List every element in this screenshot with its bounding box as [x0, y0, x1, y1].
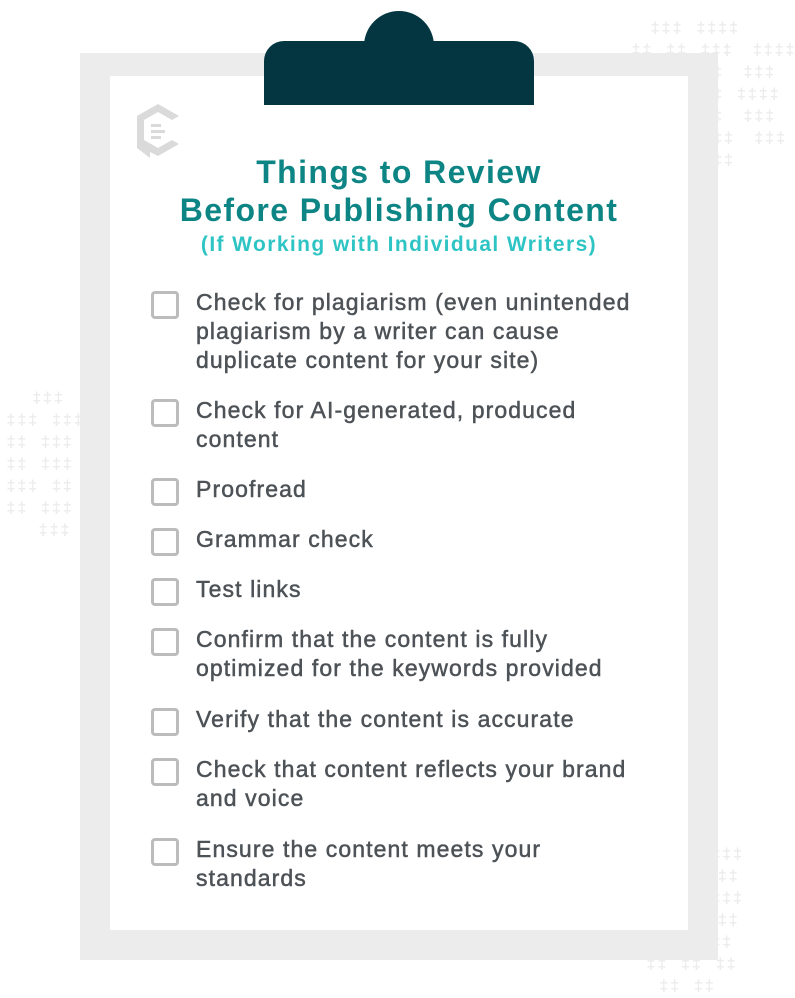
item 1 — [151, 289, 630, 374]
item 2 — [151, 397, 576, 452]
item 4 — [151, 526, 374, 556]
checklist: Ensure the content meets your — [196, 836, 541, 862]
icon: logo — [137, 104, 179, 158]
item 9 — [151, 836, 541, 891]
item 7 — [151, 706, 575, 736]
title: Things to Review — [256, 154, 542, 190]
decoration: top right ticks: ‡‡‡ ‡‡‡‡ ‡‡ ‡‡ ‡‡‡ ‡‡‡‡ ‡‡ ‡‡‡ ‡‡ ‡‡‡‡ ‡‡ ‡‡‡ ‡‡‡ ‡‡‡ ‡‡‡ — [625, 20, 795, 169]
checklist: optimized for the keywords provided — [196, 655, 603, 681]
paper — [110, 76, 688, 930]
item 8 — [151, 756, 626, 811]
checklist: and voice — [196, 785, 304, 811]
checklist: Confirm that the content is fully — [196, 626, 548, 652]
checklist: Test links — [196, 576, 302, 602]
checklist: Proofread — [196, 476, 307, 502]
item 3 — [151, 476, 307, 506]
decoration: left ticks: ‡‡‡ ‡‡‡ ‡‡‡ ‡‡ ‡‡‡ ‡‡ ‡‡‡ ‡‡‡ ‡‡ ‡‡ ‡‡‡ ‡‡‡ — [0, 390, 85, 539]
checklist: Check for AI-generated, produced — [196, 397, 576, 423]
checklist: Check for plagiarism (even unintended — [196, 289, 630, 315]
checklist: content — [196, 426, 279, 452]
checklist: Verify that the content is accurate — [196, 706, 575, 732]
checklist: Grammar check — [196, 526, 374, 552]
item 6 — [151, 626, 603, 682]
decoration: bottom right ticks: ‡‡‡ ‡‡‡ ‡‡‡ ‡‡ ‡‡‡ ‡‡‡ ‡‡‡ ‡‡ ‡‡‡ ‡‡‡ ‡‡ ‡‡ ‡‡ ‡‡ ‡‡ ‡‡ — [640, 824, 744, 995]
item 5 — [151, 576, 302, 606]
clip — [264, 11, 534, 105]
clipboard board — [80, 53, 718, 960]
subtitle: (If Working with Individual Writers) — [201, 233, 597, 256]
checklist: Check that content reflects your brand — [196, 756, 626, 782]
title: Before Publishing Content — [180, 192, 618, 228]
title — [180, 154, 618, 256]
checklist: duplicate content for your site) — [196, 347, 539, 373]
checklist: plagiarism by a writer can cause — [196, 318, 560, 344]
checklist: standards — [196, 865, 307, 891]
